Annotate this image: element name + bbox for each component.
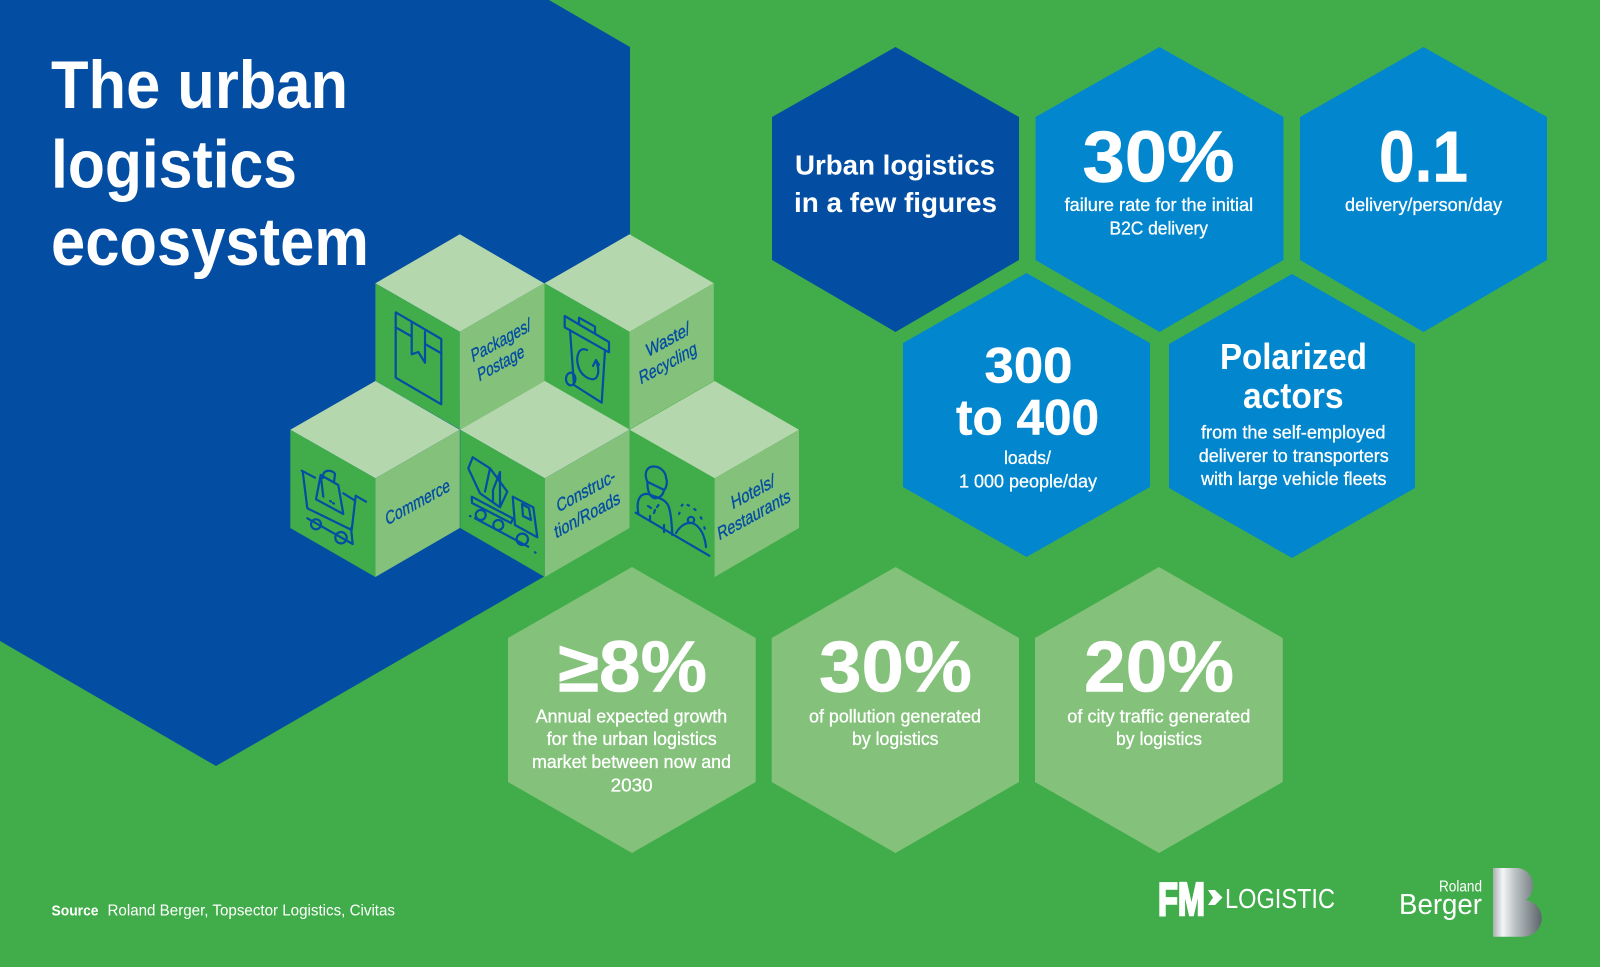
source note: Roland Berger, Topsector Logistics, Civitas — [108, 902, 395, 920]
panel: polarized actors — [1169, 274, 1415, 558]
label: construction/roads — [553, 465, 622, 543]
description: polarized actors: deliverer to transporters — [1199, 446, 1389, 466]
figure: 30%: 30% — [819, 628, 972, 708]
description: loads per 1000 people per day: 1 000 people/day — [959, 472, 1097, 492]
label: packages/postage: Postage — [476, 341, 526, 386]
source note: Source — [52, 902, 98, 920]
description: pollution — [809, 706, 981, 749]
heading: polarized actors — [1220, 336, 1367, 416]
description: polarized actors — [1199, 423, 1389, 489]
label: hotels/restaurants: Hotels/ — [730, 470, 777, 514]
description: failure rate — [1065, 195, 1253, 239]
heading: polarized actors: Polarized — [1220, 336, 1367, 377]
label: waste/recycling: Waste/ — [645, 318, 692, 362]
figure: at least 8%: ≥8% — [558, 628, 707, 708]
figure: 20%: 20% — [1084, 628, 1234, 708]
cube: waste/recycling — [544, 234, 714, 429]
icon: chef with cloche — [636, 466, 709, 556]
description: failure rate: failure rate for the initial — [1065, 195, 1253, 215]
description: polarized actors: with large vehicle fleets — [1200, 469, 1386, 489]
title: logistics — [51, 126, 297, 202]
figure: 300 to 400 — [956, 338, 1099, 445]
cube: packages/postage — [375, 234, 544, 429]
label: construction/roads: Construc- — [555, 465, 617, 517]
label: waste/recycling: Recycling — [638, 338, 698, 389]
description: annual growth — [532, 706, 731, 796]
description: city traffic: by logistics — [1116, 729, 1202, 749]
description: polarized actors: from the self-employed — [1201, 423, 1386, 443]
heading: urban logistics in a few figures — [794, 150, 997, 218]
title: ecosystem — [51, 204, 369, 280]
panel: 20% city traffic — [1035, 567, 1283, 853]
description: loads per 1000 people per day — [959, 448, 1097, 492]
logo: Roland Berger: Roland — [1439, 878, 1482, 896]
description: pollution: by logistics — [852, 729, 938, 749]
panel: 8% annual growth — [508, 567, 756, 853]
cube: construction/roads — [460, 381, 630, 577]
description: annual growth: market between now and — [532, 752, 731, 772]
description: delivery/person/day: delivery/person/day — [1345, 195, 1502, 215]
icon: recycling bin — [565, 316, 609, 403]
figure: 300 to 400: 300 — [984, 338, 1072, 394]
description: city traffic: of city traffic generated — [1067, 706, 1250, 726]
label: packages/postage — [470, 314, 533, 386]
heading: polarized actors: actors — [1243, 375, 1344, 416]
icon: shopping cart — [302, 471, 366, 544]
title — [51, 47, 369, 280]
figure: 300 to 400: to 400 — [956, 389, 1099, 445]
label: hotels/restaurants: Restaurants — [716, 485, 792, 545]
logo: Roland Berger: Berger — [1399, 889, 1482, 921]
label: commerce: Commerce — [384, 475, 452, 530]
cube: hotels/restaurants — [630, 381, 799, 577]
panel: 30% failure rate — [1036, 47, 1284, 332]
description: annual growth: Annual expected growth — [536, 706, 727, 726]
description: city traffic — [1067, 706, 1250, 749]
figure: 30%: 30% — [1082, 118, 1234, 198]
label: waste/recycling — [638, 318, 698, 389]
large dark blue hexagon backdrop — [0, 0, 630, 766]
panel: 300 to 400 loads — [903, 273, 1150, 557]
description: failure rate: B2C delivery — [1110, 219, 1208, 239]
panel: 0.1 delivery per person per day — [1300, 47, 1547, 332]
description: annual growth: 2030 — [611, 776, 653, 796]
description: pollution: of pollution generated — [809, 706, 981, 726]
heading: urban logistics in a few figures: in a few figures — [794, 187, 997, 218]
cube: commerce — [290, 381, 460, 577]
figure: 0.1: 0.1 — [1379, 118, 1468, 198]
panel: urban logistics heading hexagon — [772, 47, 1019, 332]
logo: FM Logistic — [1158, 873, 1335, 925]
panel: isometric sector cubes — [290, 234, 799, 577]
label: packages/postage: Packages/ — [470, 314, 533, 367]
icon: cement mixer truck — [468, 457, 537, 553]
description: loads per 1000 people per day: loads/ — [1004, 448, 1051, 468]
logo: FM Logistic: LOGISTIC — [1225, 883, 1335, 914]
logo: FM Logistic: FM — [1158, 873, 1205, 925]
description: annual growth: for the urban logistics — [547, 729, 717, 749]
label: construction/roads: tion/Roads — [553, 487, 622, 543]
panel: 30% pollution — [772, 567, 1019, 853]
heading: urban logistics in a few figures: Urban logistics — [795, 150, 995, 180]
logo: Roland Berger — [1399, 868, 1542, 937]
icon: parcel box — [396, 312, 441, 404]
title: The urban — [51, 47, 348, 123]
